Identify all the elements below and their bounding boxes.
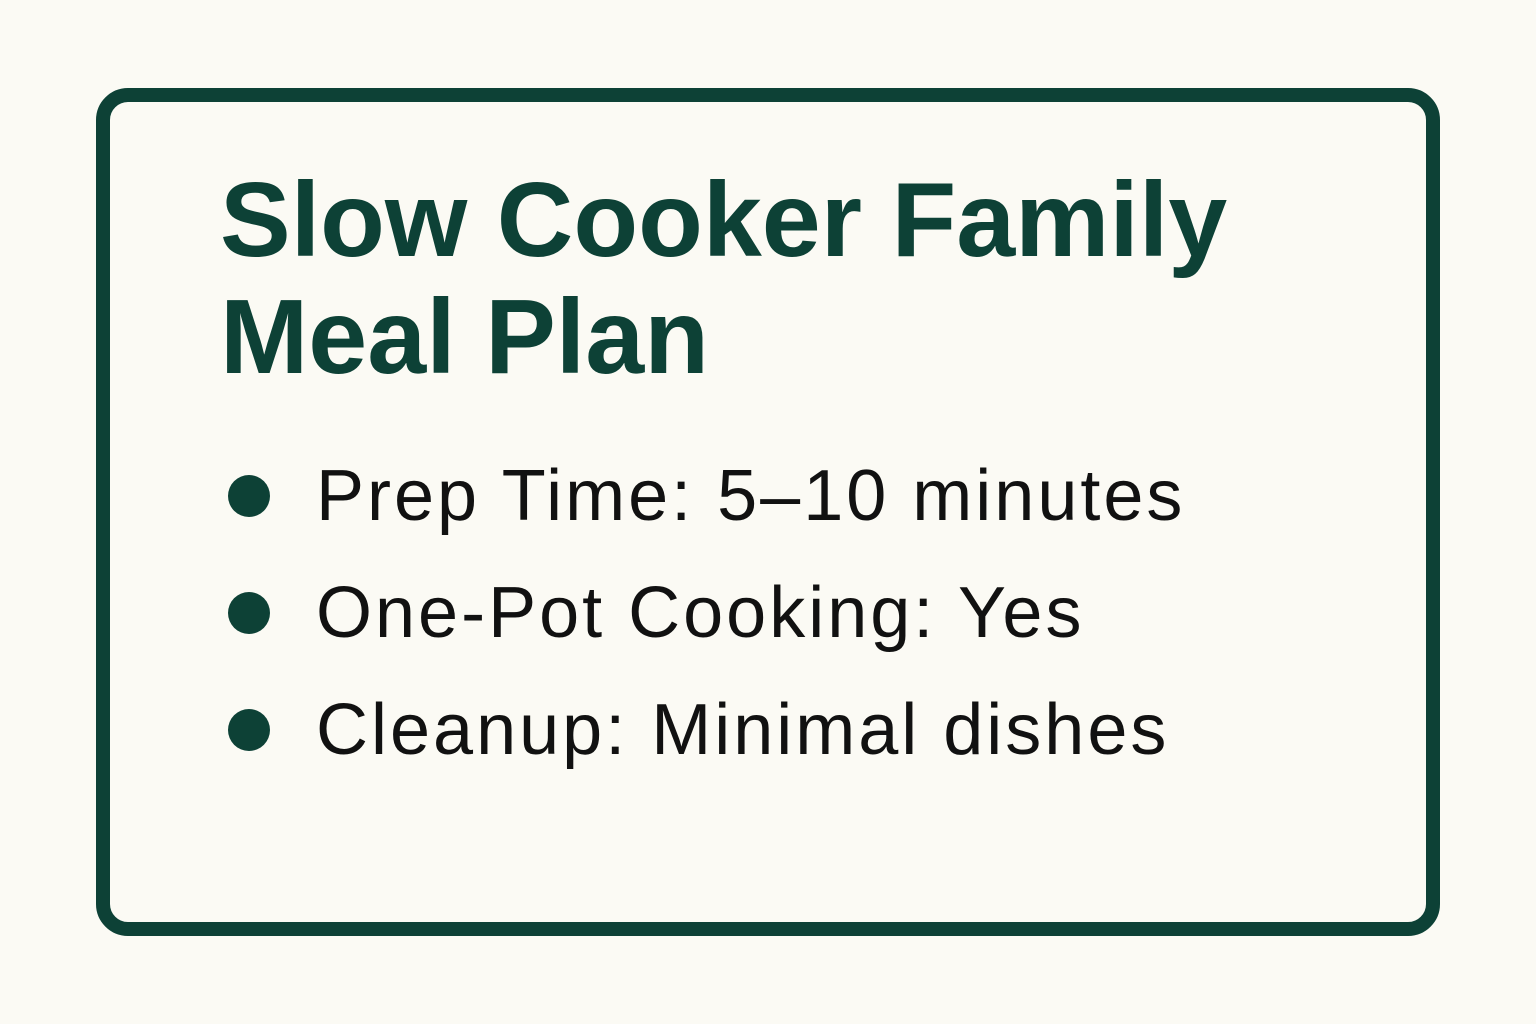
title xyxy=(220,161,1227,396)
bullet: prep time: Prep Time: 5–10 minutes xyxy=(316,456,1185,536)
bullet: one-pot: One-Pot Cooking: Yes xyxy=(316,573,1084,653)
bullet list xyxy=(228,456,1185,770)
title: Meal Plan xyxy=(220,278,709,396)
bullet: cleanup: Cleanup: Minimal dishes xyxy=(316,690,1169,770)
panel: frame xyxy=(96,88,1440,936)
title: Slow Cooker Family xyxy=(220,161,1227,279)
